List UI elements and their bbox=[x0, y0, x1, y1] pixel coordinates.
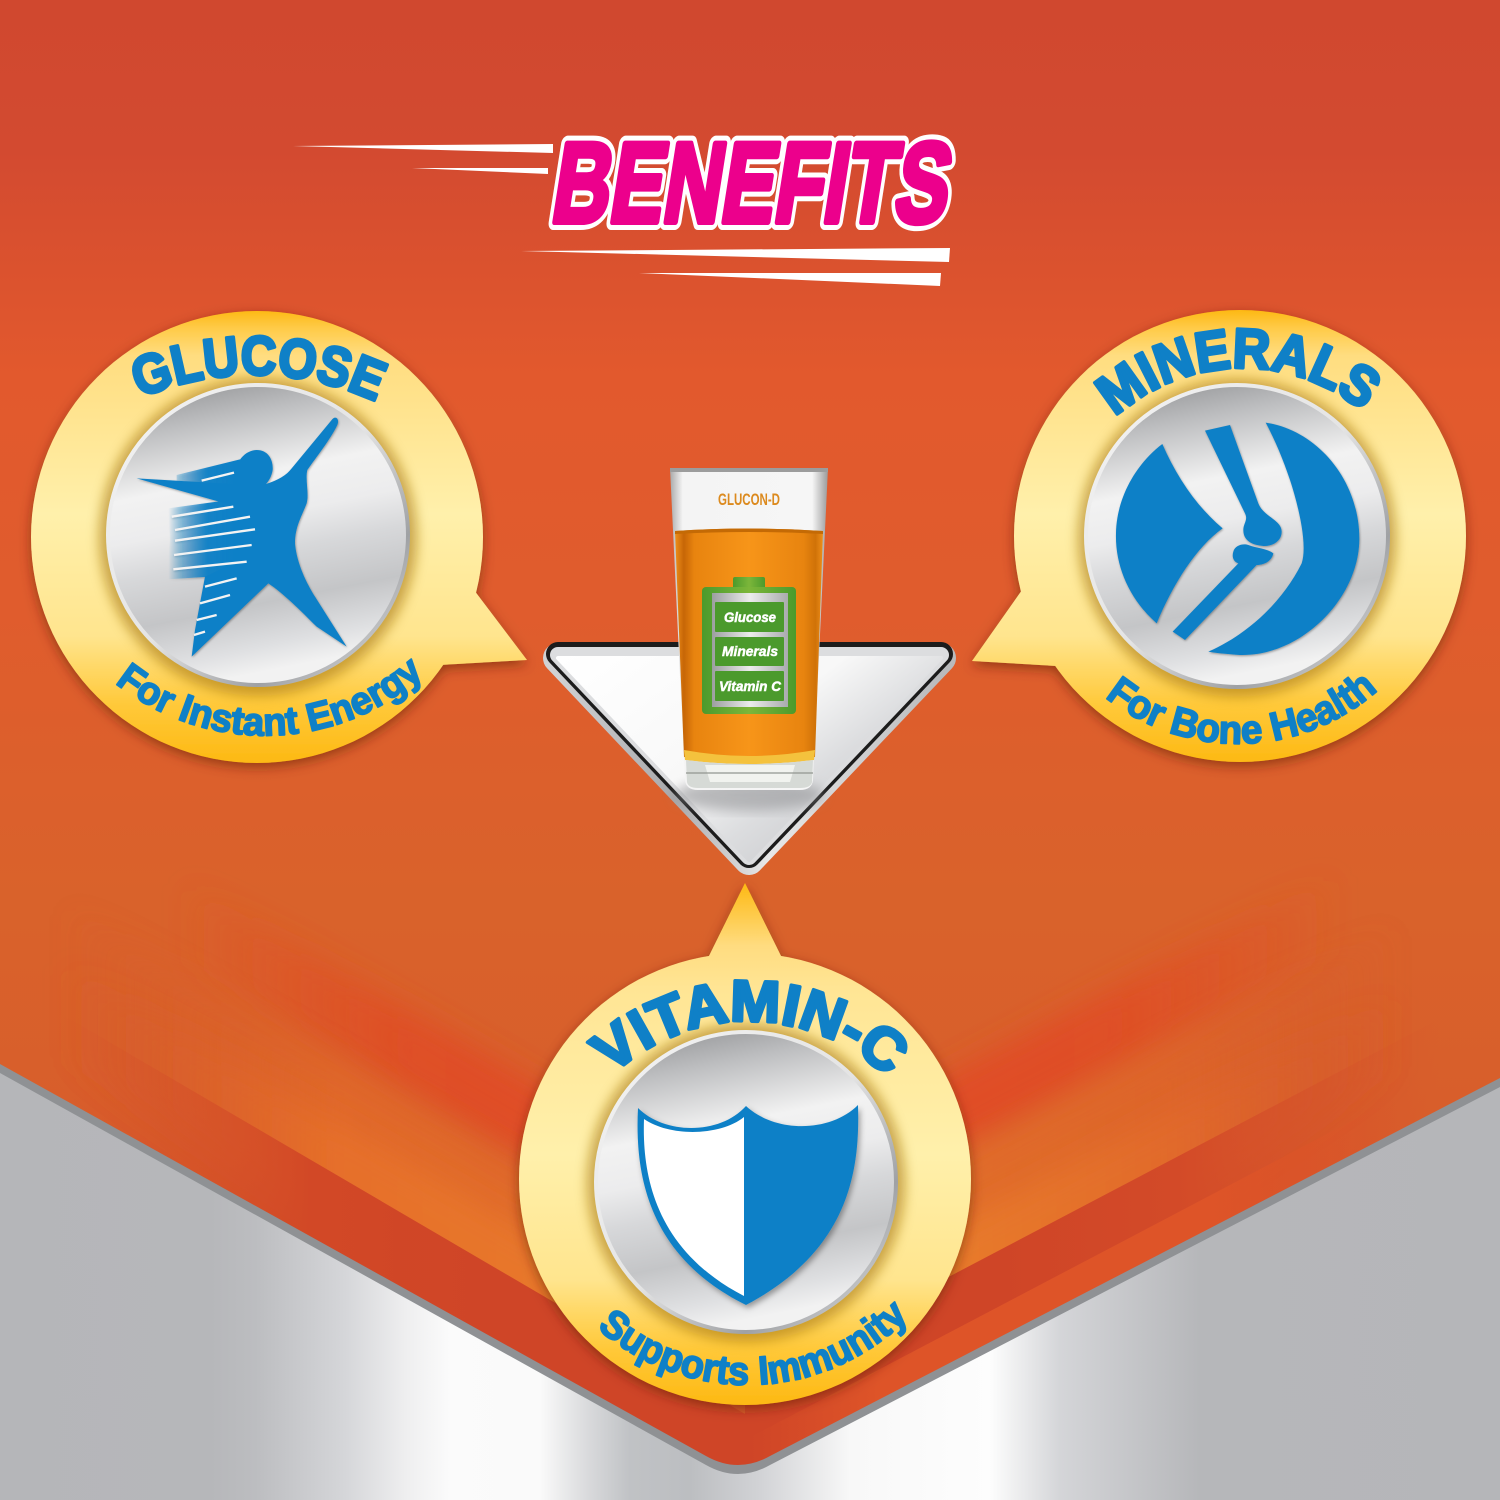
rays: right bbox=[745, 860, 1500, 1500]
icon: shield bbox=[638, 1105, 858, 1305]
glass base bbox=[686, 760, 813, 788]
silver chevron footer bbox=[0, 1064, 1500, 1500]
label: for bone health: For Bone Health bbox=[1106, 676, 1378, 745]
speed lines bbox=[293, 144, 950, 286]
title text: BENEFITS bbox=[545, 120, 961, 247]
label: minerals: MINERALS bbox=[1092, 327, 1380, 416]
glass bbox=[670, 468, 828, 790]
panel: glucose bbox=[24, 308, 530, 774]
label: vitamin-c: VITAMIN-C bbox=[586, 979, 908, 1072]
juice bbox=[675, 528, 823, 757]
battery graphic: Minerals bbox=[722, 643, 778, 659]
title text: BENEFITS bbox=[545, 120, 961, 247]
rays: left bbox=[0, 850, 745, 1500]
silver disc bbox=[108, 385, 408, 685]
badge bbox=[31, 311, 527, 763]
silver disc bbox=[596, 1032, 896, 1332]
badge bbox=[519, 883, 971, 1405]
glass brand: GLUCON-D bbox=[718, 490, 780, 509]
panel: center glass on triangle bbox=[558, 468, 941, 860]
label: supports immunity: Supports Immunity bbox=[600, 1301, 906, 1386]
triangle plate bbox=[558, 654, 941, 860]
battery graphic: Vitamin C bbox=[719, 678, 782, 694]
heading: benefits bbox=[293, 120, 961, 286]
badge bbox=[972, 310, 1466, 762]
battery graphic bbox=[702, 577, 796, 714]
panel: minerals bbox=[970, 306, 1474, 774]
silver disc bbox=[1086, 385, 1388, 687]
label: glucose: GLUCOSE bbox=[132, 334, 390, 402]
panel: vitamin c bbox=[512, 883, 978, 1416]
label: for instant energy: For Instant Energy bbox=[116, 658, 421, 737]
icon: running figure bbox=[137, 418, 347, 657]
battery graphic: Glucose bbox=[724, 609, 776, 625]
icon: knee joint bbox=[1116, 423, 1359, 655]
